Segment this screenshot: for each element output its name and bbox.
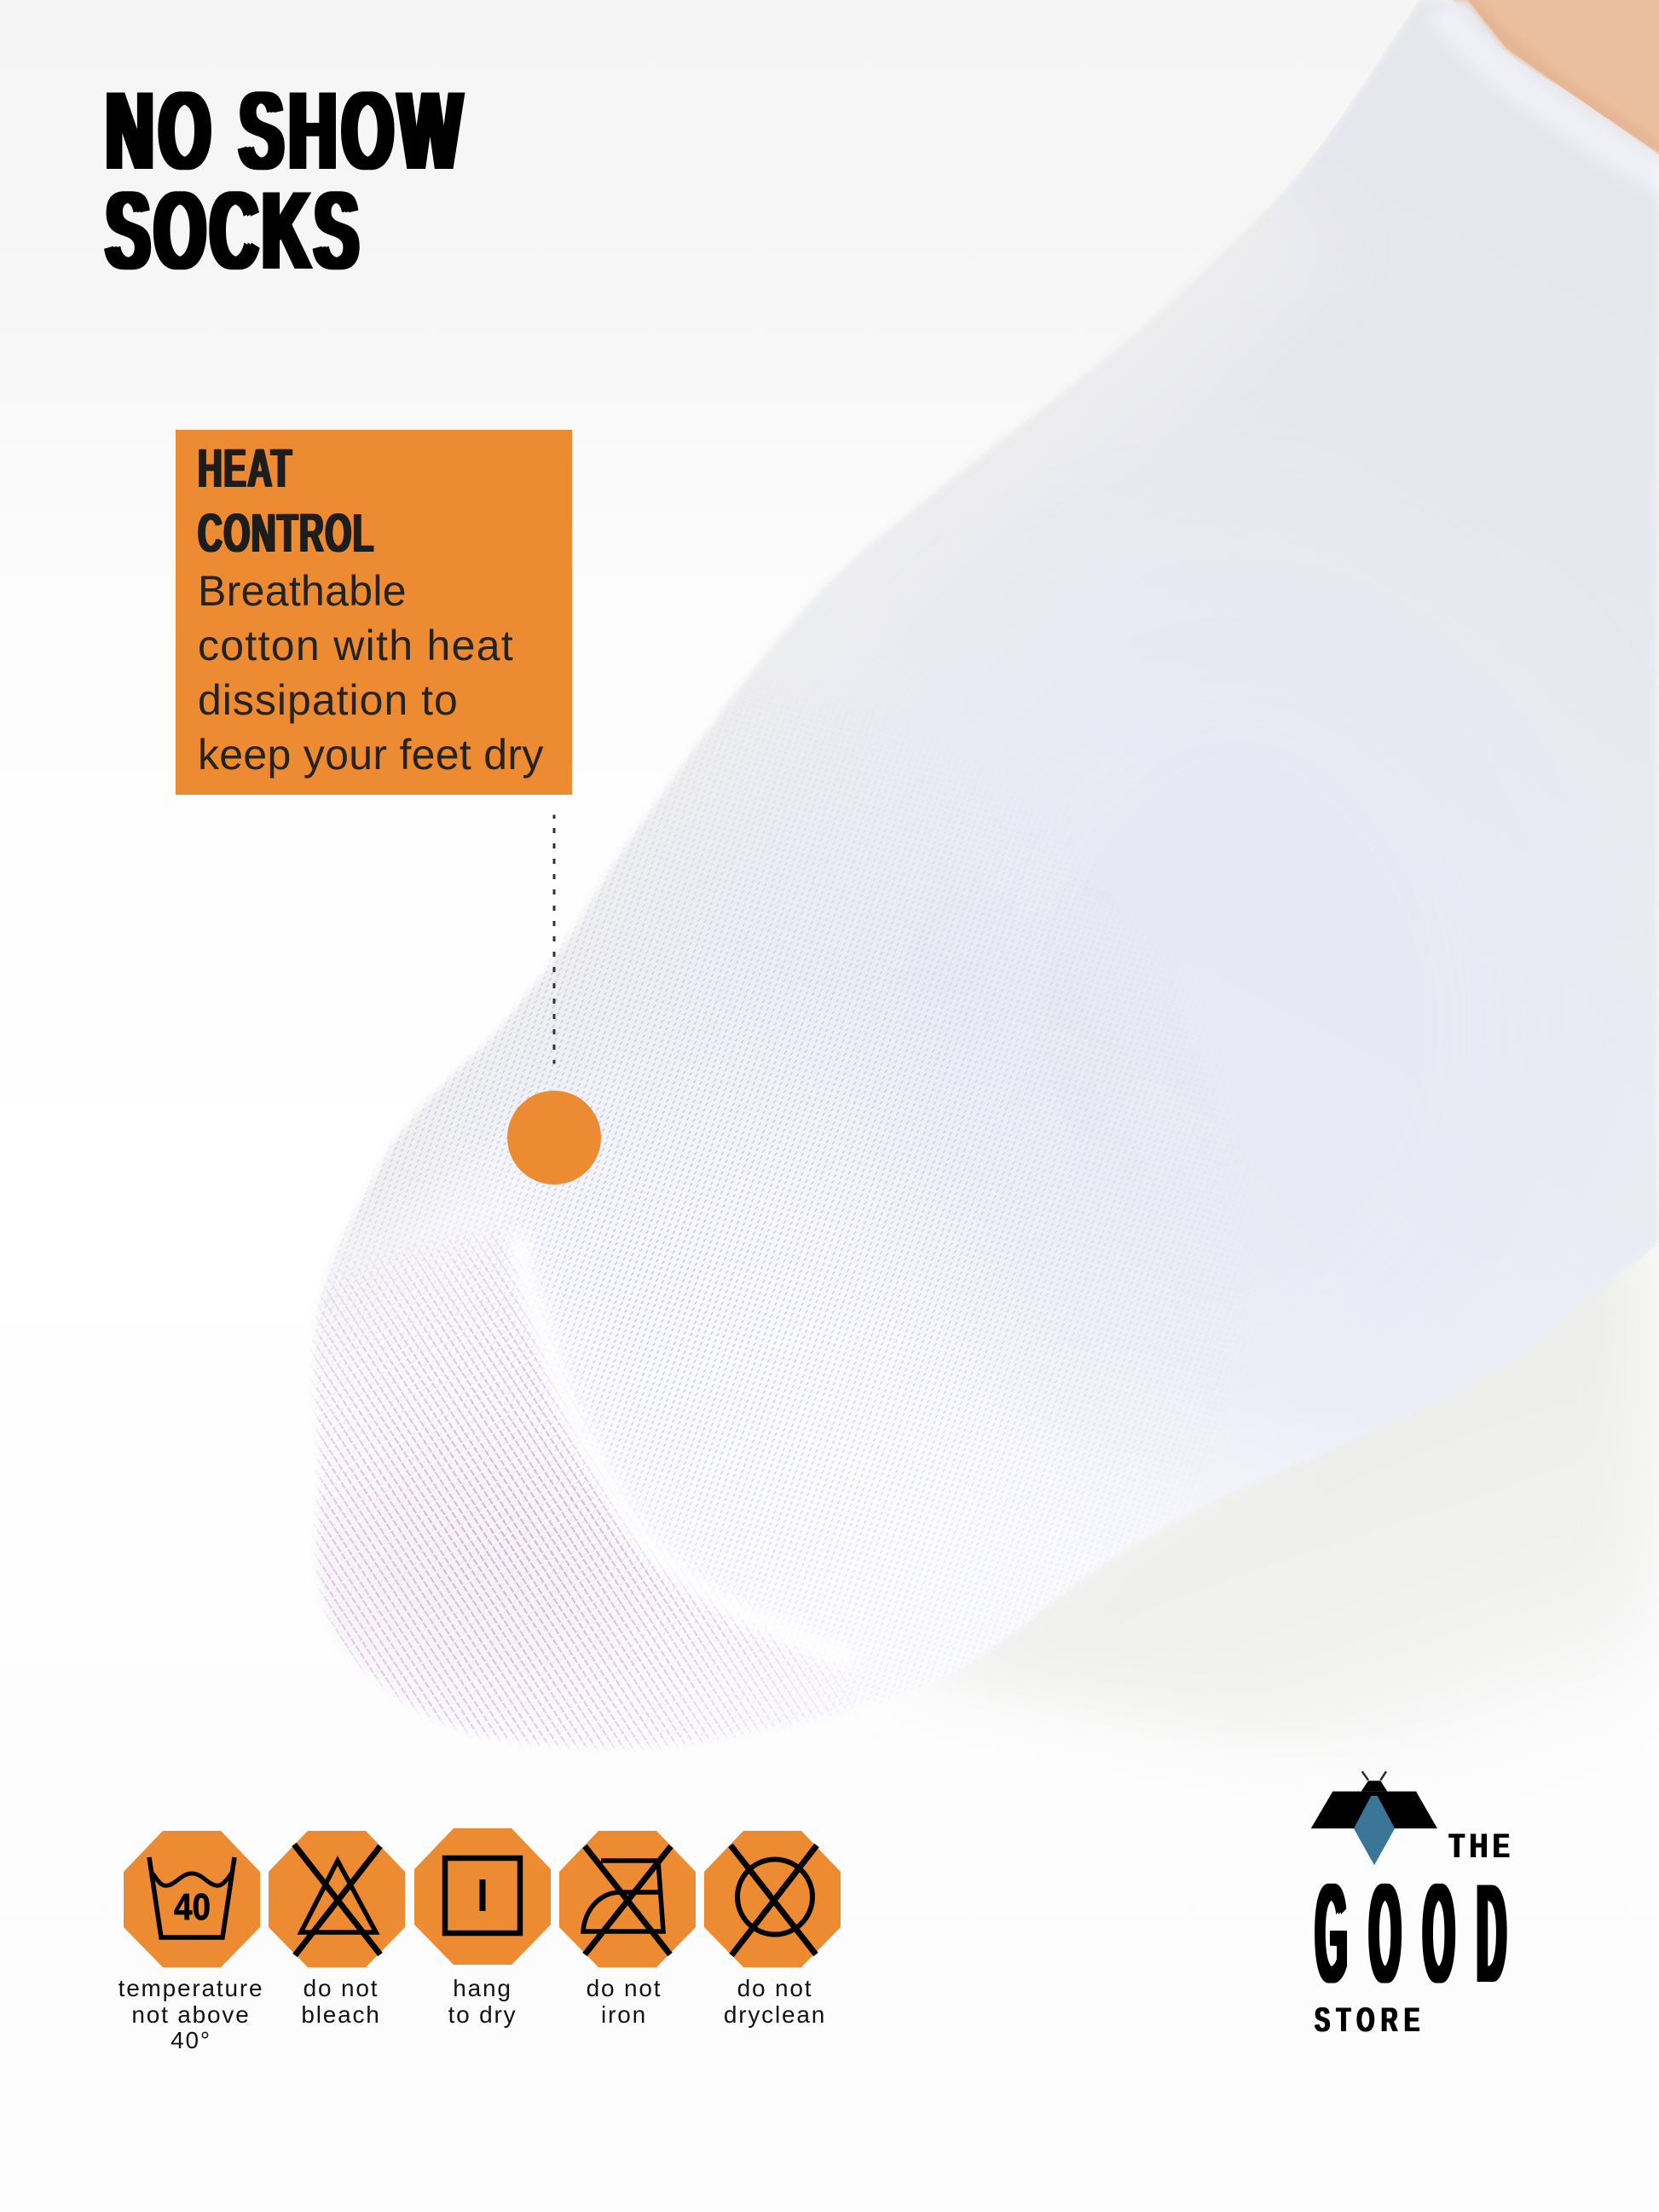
- caption: hang to dry: hang: [453, 1975, 512, 2001]
- caption: hang to dry: to dry: [448, 2001, 517, 2028]
- callout panel: heat control: [176, 430, 572, 795]
- caption: do not iron: do not: [587, 1975, 662, 2001]
- caption: temperature: temperature: [118, 1975, 263, 2001]
- caption: do not dryclean: do not: [737, 1975, 812, 2001]
- title: No Show Socks: SOCKS: [106, 168, 362, 292]
- care icon: hang to dry: [414, 1828, 551, 1965]
- logo icon: insect: [1304, 1765, 1449, 1872]
- care icon: do not dryclean: [704, 1831, 841, 1967]
- callout heading: HEAT: [198, 437, 293, 499]
- dotted leader line: [552, 815, 556, 1064]
- callout heading: CONTROL: [198, 502, 375, 564]
- product photo: white sock on a light background: [311, 0, 1659, 1751]
- caption: temperature: 40°: [171, 2027, 211, 2053]
- caption: do not iron: iron: [601, 2001, 647, 2028]
- logo word: good: GOOD: [1315, 1855, 1529, 2012]
- caption: hang to dry: [448, 1975, 517, 2028]
- callout body text: [198, 567, 544, 779]
- logo: The Good Store: [1304, 1765, 1517, 2038]
- caption: do not dryclean: [673, 1976, 877, 2028]
- callout heading: [198, 437, 375, 564]
- title: No Show Socks: NO SHOW: [106, 68, 466, 193]
- caption: temperature: not above: [131, 2001, 251, 2028]
- logo word: store: STORE: [1315, 2001, 1426, 2039]
- callout body text: Breathable: [198, 567, 407, 615]
- caption: do not bleach: do not: [303, 1975, 379, 2001]
- marker dot on sock: [507, 1091, 601, 1184]
- care icon: do not iron: [559, 1831, 696, 1967]
- caption: temperature: [118, 1975, 263, 2053]
- title: No Show Socks: [104, 68, 466, 292]
- callout body text: keep your feet dry: [198, 731, 544, 779]
- callout body text: cotton with heat: [198, 622, 514, 669]
- caption: do not dryclean: dryclean: [724, 2001, 826, 2028]
- care icon: wash at 40: [124, 1831, 260, 1967]
- caption: do not bleach: bleach: [301, 2001, 381, 2028]
- care icon: do not bleach: [269, 1831, 405, 1967]
- logo word: the: THE: [1449, 1827, 1515, 1865]
- callout body text: dissipation to: [198, 676, 459, 724]
- caption: do not bleach: [301, 1975, 381, 2028]
- care icon: wash at 40: 40: [174, 1886, 211, 1928]
- caption: do not iron: [522, 1976, 726, 2028]
